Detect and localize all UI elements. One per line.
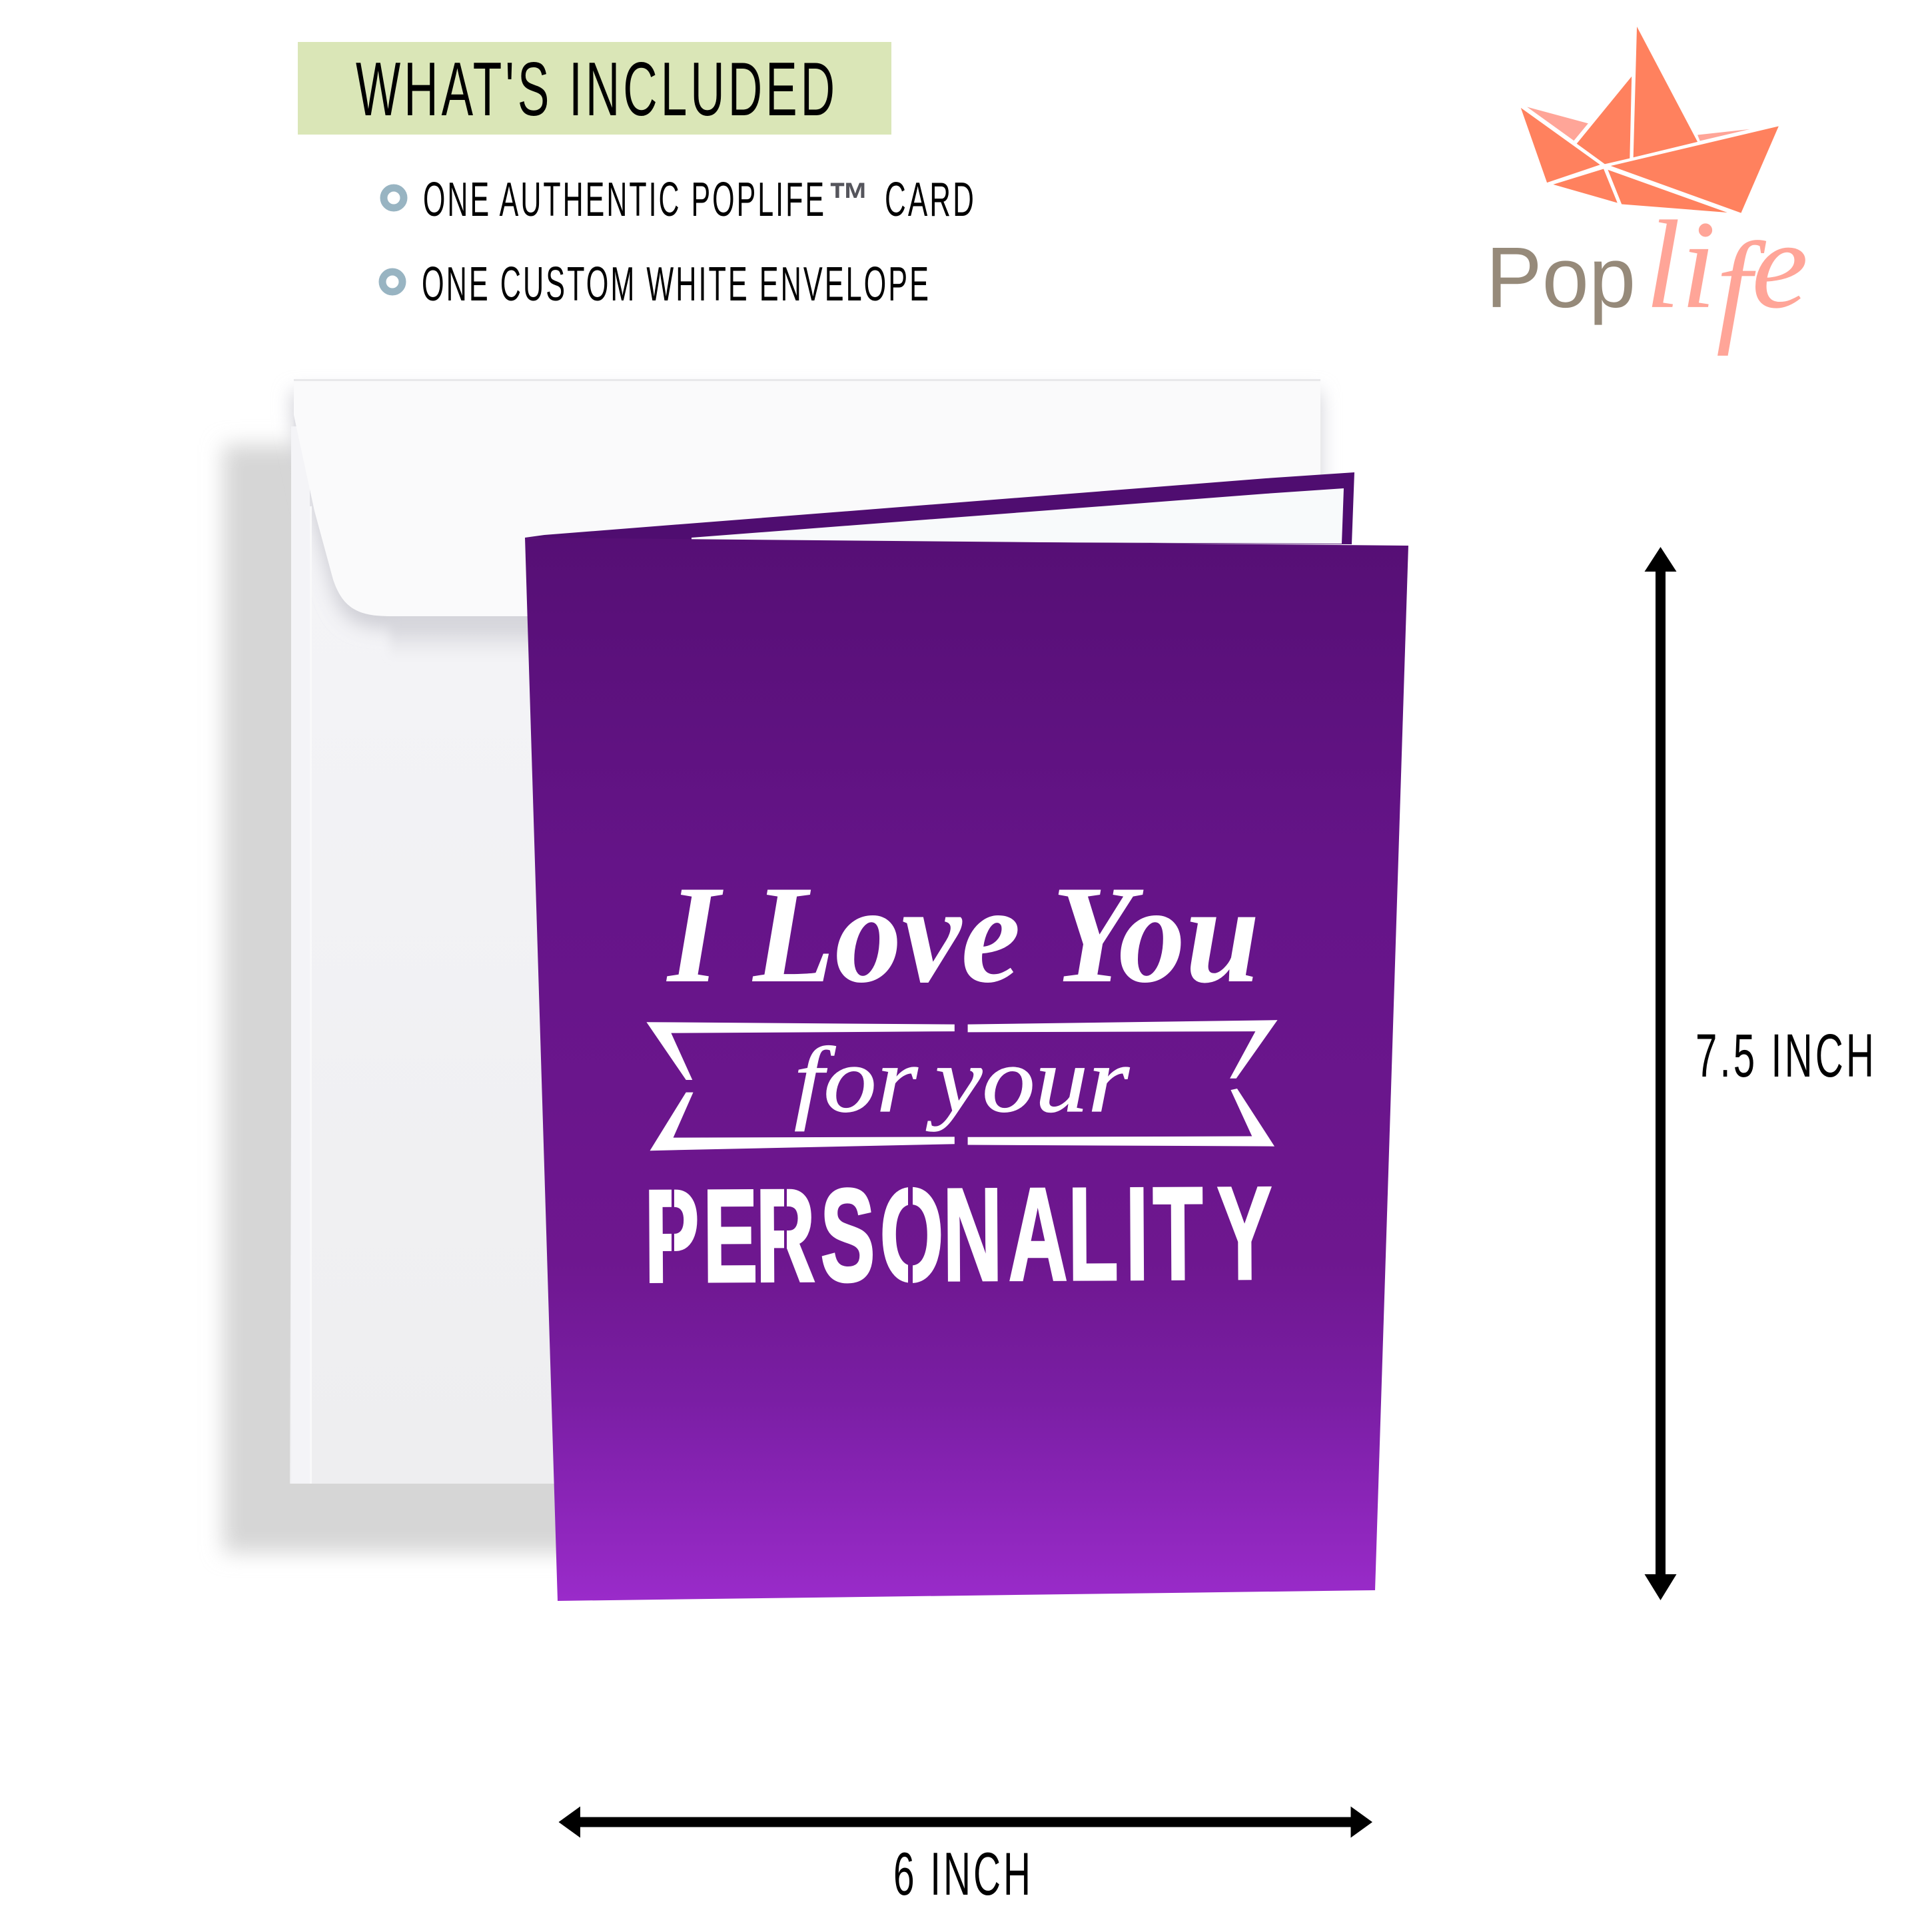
text: one custom white envelope: ONE CUSTOM WHITE ENVELOPE [422,258,931,311]
icon: bullet ring two [382,272,402,292]
ribbon banner [646,1020,1278,1151]
label: 6 inch: 6 INCH [893,1841,1033,1908]
envelope body [290,380,1320,1484]
wordmark: life: li [1646,195,1718,334]
icon: bullet ring one [384,188,404,208]
icon: origami paper boat [1521,27,1779,213]
cut-out text: for your: for your [794,1029,1130,1132]
heading: what's included: WHAT'S INCLUDED [356,47,838,132]
envelope flap [294,380,1320,616]
wordmark: pop: Pop [1486,229,1636,325]
text: one authentic poplife card: ONE AUTHENTIC POPLIFE [423,173,826,227]
envelope shadow [223,445,623,1552]
greeting card [525,472,1408,1601]
text: one authentic poplife card: CARD [885,173,976,227]
arrow: width dimension [558,1807,1372,1837]
card back cover [525,472,1354,544]
logo: poplife [1486,27,1808,356]
wordmark: life: e [1751,195,1808,334]
envelope with drop shadow [223,379,1320,1552]
card front cover [525,538,1408,1601]
list: included items [382,173,976,311]
text: one authentic poplife card: ™ [828,173,869,227]
arrow: height dimension [1644,547,1676,1600]
wordmark: life: f [1716,217,1766,356]
card inside page [692,488,1344,544]
cut-out text: i love you: I Love You [666,857,1260,1012]
cut-out text: personality: PERSONALITY [644,1159,1272,1310]
heading: what's included [298,42,891,135]
